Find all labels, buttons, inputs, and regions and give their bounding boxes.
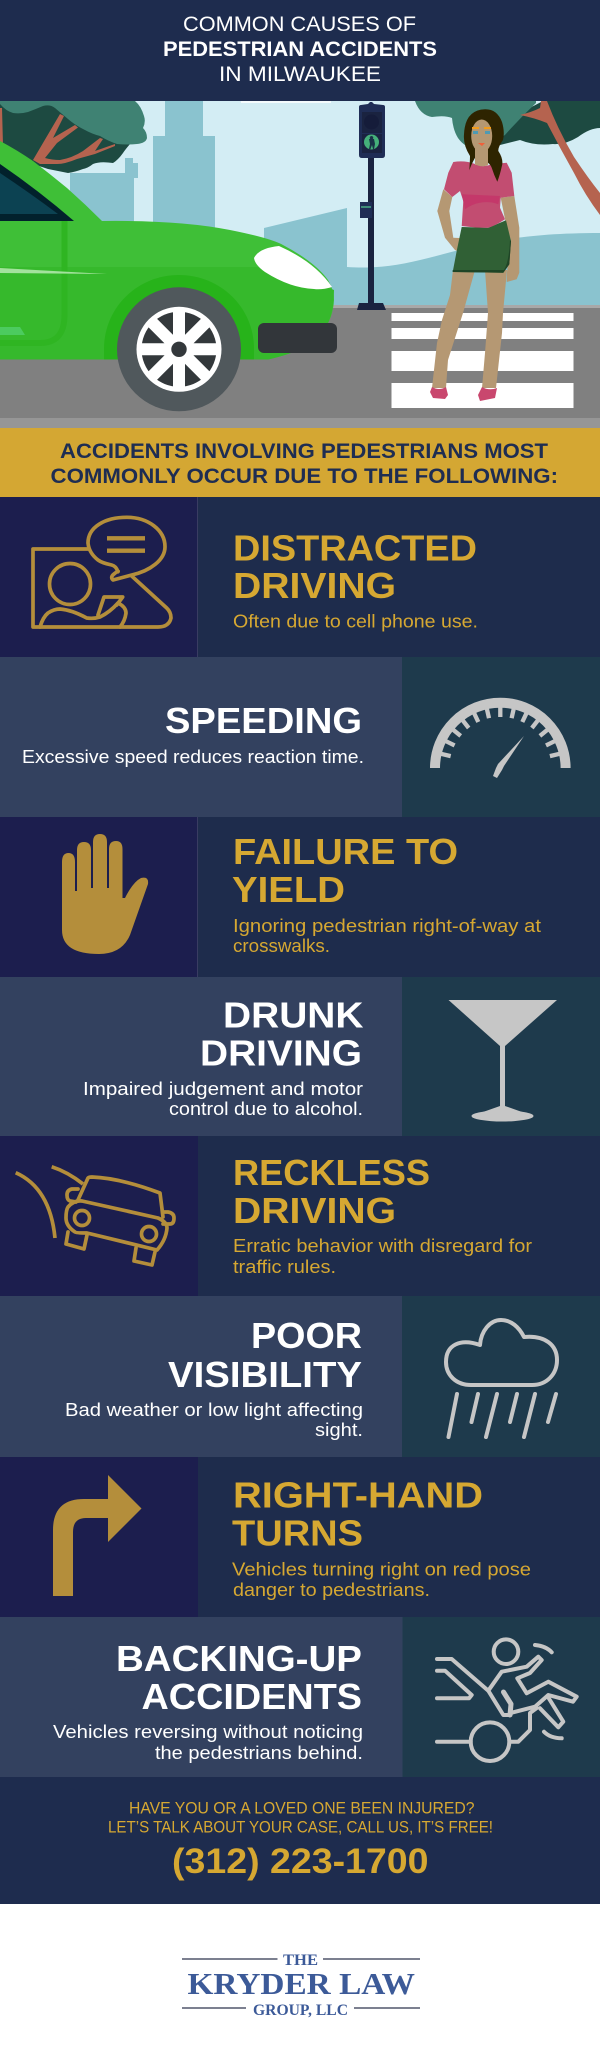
heading (233, 528, 477, 606)
header panel (0, 0, 600, 101)
heading: BACKING-UP (116, 1638, 362, 1679)
description: Impaired judgement and motor (83, 1079, 363, 1099)
title: IN MILWAUKEE (219, 62, 381, 86)
description: crosswalks. (233, 936, 330, 956)
description: Vehicles turning right on red pose (232, 1560, 531, 1580)
description (233, 916, 541, 956)
gold banner (0, 428, 600, 497)
heading: RIGHT-HAND (233, 1474, 483, 1516)
heading: DRUNK (223, 994, 364, 1036)
logo: The Kryder Law Group, LLC: GROUP, LLC (253, 2002, 348, 2019)
call to action text: HAVE YOU OR A LOVED ONE BEEN INJURED? (129, 1798, 474, 1818)
description (232, 1560, 531, 1600)
heading: DRIVING (200, 1032, 362, 1074)
description: traffic rules. (233, 1257, 336, 1277)
logo: The Kryder Law Group, LLC: THE (283, 1952, 318, 1969)
title: PEDESTRIAN ACCIDENTS (163, 37, 437, 61)
banner text (50, 439, 558, 488)
heading: SPEEDING (165, 700, 362, 741)
heading: DRIVING (233, 1190, 396, 1231)
crosswalk stripes (392, 313, 574, 408)
heading (116, 1638, 362, 1717)
call to action text: LET’S TALK ABOUT YOUR CASE, CALL US, IT’S FREE! (108, 1818, 493, 1836)
icon: right-turn arrow (53, 1475, 142, 1596)
woman pedestrian (430, 109, 519, 401)
title: COMMON CAUSES OF (183, 12, 416, 36)
description: Excessive speed reduces reaction time. (22, 747, 364, 767)
icon: driver with speech bubble (33, 517, 171, 627)
heading (232, 831, 458, 910)
panel: backing-up accidents (0, 1617, 600, 1777)
road (0, 305, 600, 428)
call to action text (108, 1798, 493, 1836)
heading: YIELD (232, 869, 345, 910)
heading: VISIBILITY (168, 1354, 362, 1395)
icon: pedestrian hit by car (437, 1639, 577, 1761)
heading (233, 1152, 430, 1231)
description (233, 1236, 532, 1277)
heading: RECKLESS (233, 1152, 430, 1193)
pedestrian traffic signal (357, 102, 386, 310)
description: the pedestrians behind. (155, 1743, 363, 1763)
description: Vehicles reversing without noticing (53, 1722, 363, 1742)
panel: distracted driving (0, 497, 600, 657)
heading: FAILURE TO (233, 831, 458, 872)
description: danger to pedestrians. (233, 1580, 430, 1600)
panel: right-hand turns (0, 1457, 600, 1617)
description (65, 1400, 363, 1440)
icon: speedometer (435, 703, 566, 778)
heading: DISTRACTED (233, 528, 477, 568)
illustration: pedestrian at crosswalk and car (0, 101, 600, 428)
banner text: COMMONLY OCCUR DUE TO THE FOLLOWING: (50, 464, 558, 488)
panel: speeding (0, 657, 600, 817)
icon: rain cloud (446, 1320, 557, 1437)
description: Erratic behavior with disregard for (233, 1236, 532, 1256)
logo: The Kryder Law Group, LLC: KRYDER LAW (188, 1966, 415, 2001)
call to action panel (0, 1777, 600, 1904)
panel: drunk driving (0, 977, 600, 1136)
icon: martini glass (448, 1000, 557, 1122)
description: Bad weather or low light affecting (65, 1400, 363, 1420)
heading (232, 1474, 483, 1554)
panel: reckless driving (0, 1136, 600, 1296)
car (0, 141, 337, 411)
description (53, 1722, 363, 1763)
description: sight. (315, 1420, 363, 1440)
city skyline (70, 101, 600, 306)
heading: POOR (251, 1315, 362, 1356)
panel: failure to yield (0, 817, 600, 977)
description: Often due to cell phone use. (233, 612, 478, 632)
icon: hand (62, 834, 148, 954)
description: Ignoring pedestrian right-of-way at (233, 916, 541, 936)
heading: TURNS (232, 1512, 363, 1554)
panel: poor visibility (0, 1296, 600, 1457)
title (163, 12, 437, 86)
heading (200, 994, 364, 1074)
heading (168, 1315, 362, 1395)
wheel (117, 287, 241, 411)
right tree (415, 101, 600, 215)
heading: DRIVING (233, 565, 396, 606)
heading: ACCIDENTS (142, 1676, 362, 1717)
icon: swerving car (16, 1167, 174, 1265)
left tree (0, 101, 147, 173)
description: control due to alcohol. (169, 1099, 363, 1119)
phone number: (312) 223-1700 (172, 1842, 428, 1881)
description (83, 1079, 363, 1119)
banner text: ACCIDENTS INVOLVING PEDESTRIANS MOST (60, 439, 548, 463)
logo: The Kryder Law Group, LLC (182, 1952, 420, 2019)
